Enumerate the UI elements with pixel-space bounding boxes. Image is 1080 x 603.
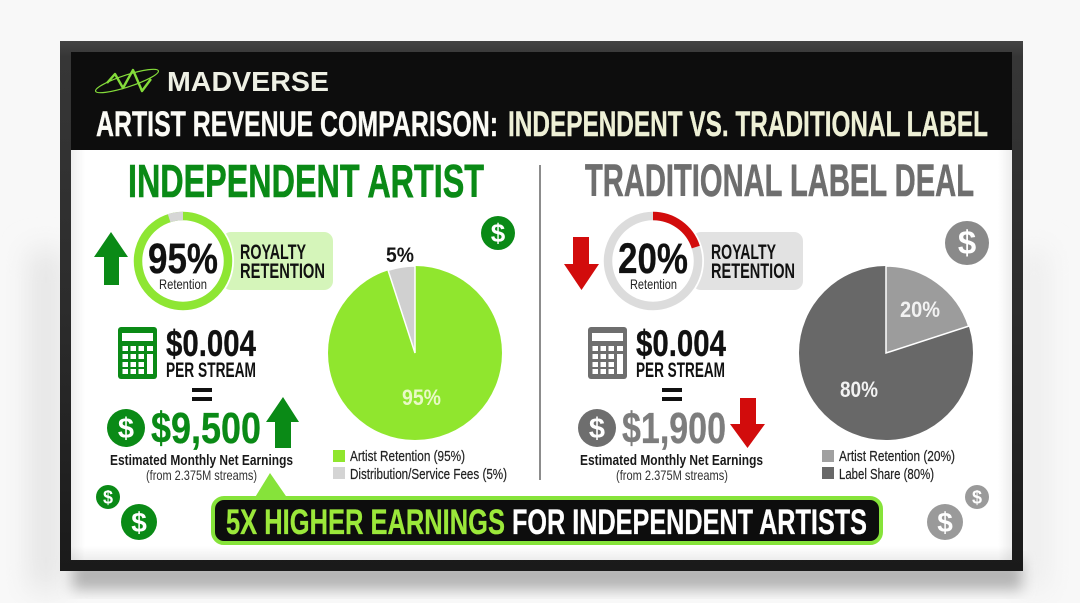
icon: dollar coin (481, 216, 515, 250)
legend (333, 449, 507, 483)
callout banner: FOR INDEPENDENT ARTISTS (512, 503, 867, 542)
icon: up arrow (94, 232, 128, 285)
royalty retention pill (692, 232, 803, 290)
header band (71, 52, 1012, 150)
per stream rate: $0.004 (636, 323, 726, 364)
earnings caption: Estimated Monthly Net Earnings (110, 452, 293, 469)
icon: small dollar coin (96, 485, 120, 509)
royalty retention pill: ROYALTY (711, 241, 776, 264)
royalty retention pill: ROYALTY (240, 241, 306, 264)
icon: dollar coin (927, 504, 963, 540)
callout banner: 5X HIGHER EARNINGS (226, 503, 505, 542)
per stream rate: $0.004 (166, 323, 256, 364)
panel: traditional label deal (564, 155, 989, 540)
per stream rate: PER STREAM (636, 359, 725, 382)
earnings caption (110, 452, 293, 483)
icon: dollar coin: $ (131, 507, 147, 538)
panel: independent artist (94, 155, 515, 540)
equals sign (662, 388, 682, 401)
legend: Artist Retention (20%) (839, 449, 955, 465)
title (96, 105, 988, 144)
earnings value: $9,500 (151, 404, 261, 453)
retention ring 95%: 95% (148, 235, 218, 283)
pie chart: 95/5: 5% (386, 244, 414, 267)
pie chart: 20/80 (799, 266, 973, 440)
earnings caption: (from 2.375M streams) (616, 467, 728, 483)
icon: down arrow (730, 398, 765, 448)
royalty retention pill: RETENTION (711, 260, 795, 283)
title: ARTIST REVENUE COMPARISON: (96, 105, 498, 144)
pie chart: 95/5: 95% (402, 385, 441, 410)
equals sign (192, 388, 212, 401)
legend: Label Share (80%) (839, 467, 934, 483)
icon: small dollar coin: $ (972, 488, 982, 508)
icon: up arrow (266, 397, 299, 448)
white screen panel (71, 52, 1012, 560)
retention ring 95%: Retention (159, 276, 207, 292)
per stream rate (636, 323, 726, 382)
legend: Artist Retention (95%) (350, 449, 465, 465)
retention ring 20%: 20% (618, 235, 688, 283)
icon: dollar coin (107, 409, 145, 447)
earnings caption: Estimated Monthly Net Earnings (580, 452, 763, 469)
pie chart: 20/80: 80% (840, 377, 878, 402)
icon: small dollar coin: $ (103, 488, 113, 508)
heading: independent artist: INDEPENDENT ARTIST (128, 155, 484, 207)
icon: Madverse logo (94, 65, 160, 97)
pie chart: 95/5 (328, 244, 502, 440)
icon: calculator (588, 327, 627, 379)
earnings value: $1,900 (622, 404, 726, 453)
royalty retention pill (222, 232, 333, 290)
icon: dollar coin: $ (491, 218, 506, 248)
earnings caption (580, 452, 763, 483)
icon: dollar coin (578, 409, 616, 447)
retention ring 20%: Retention (630, 276, 677, 292)
icon: calculator (118, 327, 157, 379)
icon: small dollar coin (965, 485, 989, 509)
icon: dollar coin: $ (937, 507, 953, 538)
icon: dollar coin: $ (118, 413, 134, 445)
icon: dollar coin (121, 504, 157, 540)
royalty retention pill: RETENTION (240, 260, 325, 283)
retention ring 95% (132, 210, 234, 312)
per stream rate (166, 323, 256, 382)
legend (822, 449, 955, 483)
icon: dollar coin: $ (958, 224, 976, 261)
retention ring 20% (602, 210, 704, 312)
legend: Distribution/Service Fees (5%) (350, 467, 507, 483)
earnings caption: (from 2.375M streams) (146, 467, 257, 483)
per stream rate: PER STREAM (166, 359, 256, 382)
pie chart: 20/80: 20% (900, 297, 940, 322)
callout banner (213, 473, 881, 543)
picture frame (60, 41, 1023, 571)
icon: down arrow (564, 237, 599, 290)
icon: dollar coin: $ (589, 413, 605, 445)
logo wordmark: MADVERSE (167, 66, 329, 97)
icon: dollar coin (945, 221, 989, 265)
